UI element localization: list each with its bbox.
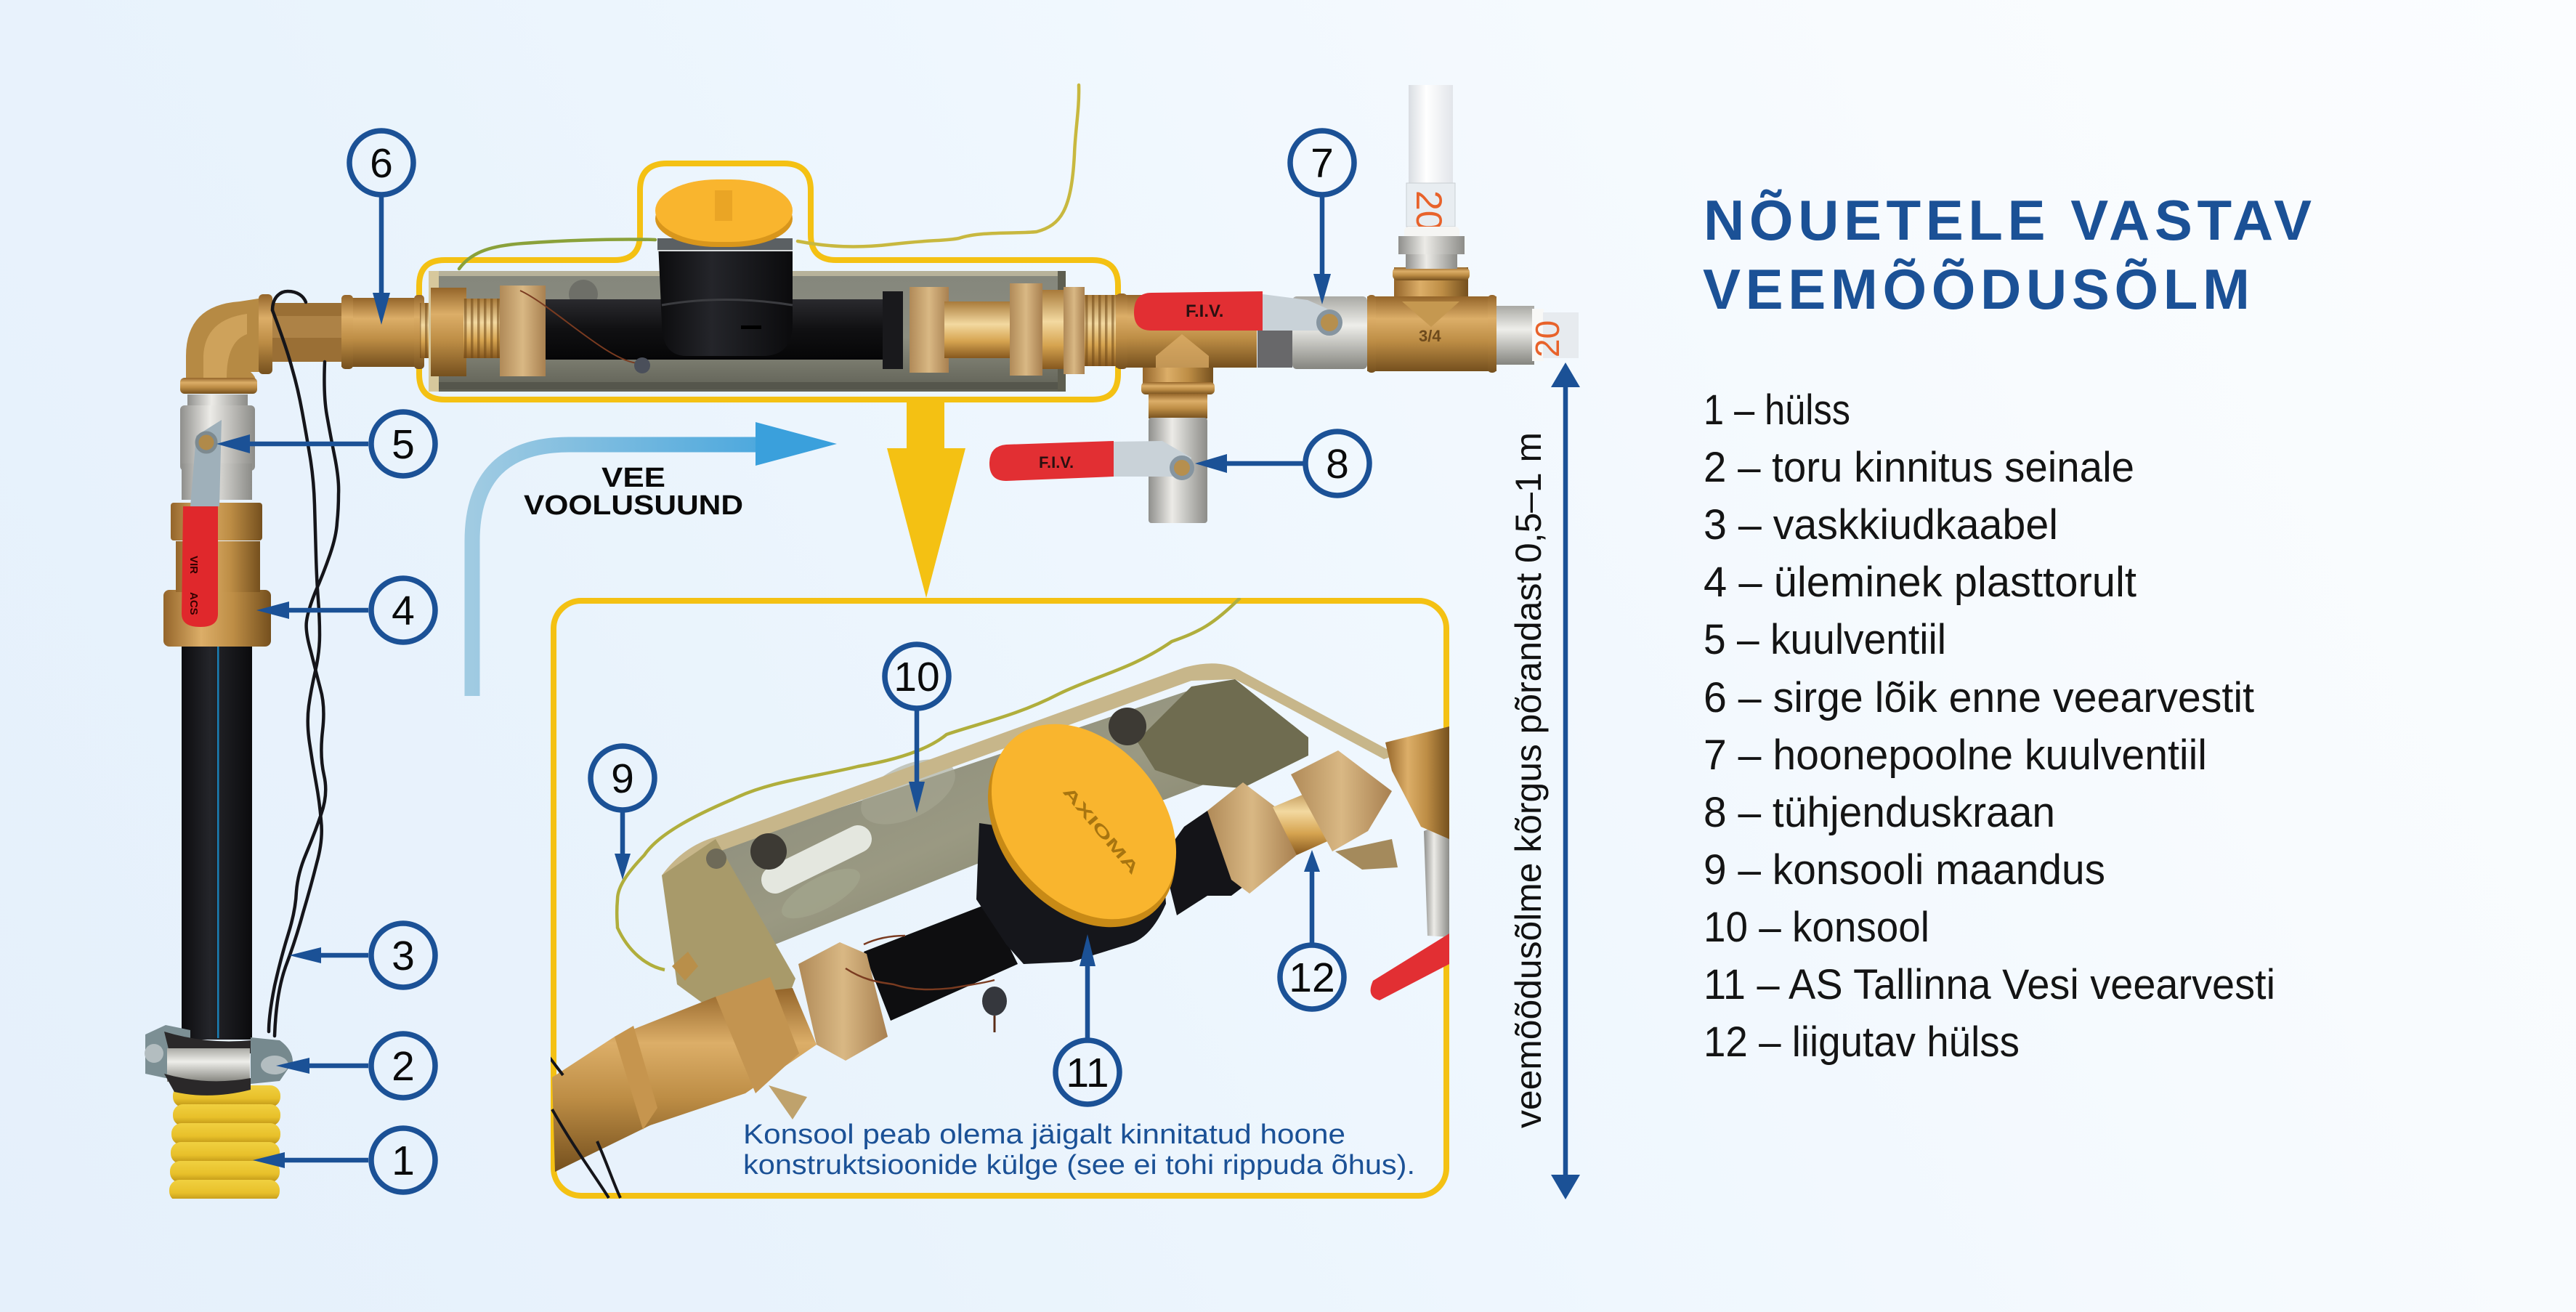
black meter pipe — [546, 299, 885, 360]
detail view photo: AXIOMA — [1059, 783, 1142, 878]
yellow meter cap — [988, 756, 1175, 927]
black plastic pipe — [182, 644, 252, 1040]
legend list: 2 – toru kinnitus seinale — [1704, 444, 2134, 491]
photo: fittings inside console — [431, 283, 1116, 376]
photo: copper wire and seal — [520, 291, 650, 373]
red handle — [1371, 934, 1449, 1000]
water flow direction arrow — [472, 422, 837, 696]
callout 1 — [253, 1128, 435, 1192]
silver valve — [1257, 329, 1292, 368]
callout 7 — [1290, 131, 1354, 304]
callout 12: 12 — [1289, 955, 1335, 1001]
copper wire — [846, 936, 995, 989]
brass pipes and nuts — [552, 988, 817, 1172]
detail view frame — [554, 601, 1446, 1196]
elbow — [186, 298, 263, 381]
console left arm — [662, 839, 795, 1016]
flow direction label: VOOLUSUUND — [524, 490, 743, 521]
white riser pipe and fittings — [1409, 85, 1453, 187]
flow direction label — [524, 463, 743, 521]
photo: black copper-fiber cable — [269, 291, 339, 1036]
detail note text: Konsool peab olema jäigalt kinnitatud hoone — [743, 1119, 1345, 1150]
brass nuts — [500, 286, 546, 376]
left tee and drain branch — [1143, 356, 1213, 385]
legend list: 8 – tühjenduskraan — [1704, 789, 2055, 836]
title — [1703, 188, 2312, 321]
legend list: 6 – sirge lõik enne veearvestit — [1704, 674, 2254, 721]
callout 2 — [276, 1034, 435, 1098]
callout 4: 4 — [392, 588, 415, 634]
grounding wire — [617, 598, 1240, 970]
photo: drain valve handle: F.I.V. — [1039, 453, 1074, 471]
title: NÕUETELE VASTAV — [1704, 188, 2312, 252]
title: VEEMÕÕDUSÕLM — [1703, 257, 2250, 321]
brass coupling — [163, 590, 271, 647]
pipe clamp — [145, 1025, 293, 1096]
callout 1: 1 — [392, 1138, 415, 1184]
silver ball valve body — [187, 394, 248, 427]
callout 5 — [216, 412, 435, 476]
callout 2: 2 — [392, 1043, 415, 1090]
photo: right-hand tee, valves and drain: 20 — [1409, 190, 1449, 231]
callout 5: 5 — [392, 421, 415, 468]
right tee — [1394, 267, 1468, 304]
slot — [775, 839, 858, 880]
callout 7: 7 — [1311, 140, 1334, 187]
legend list: 12 – liigutav hülss — [1704, 1019, 2020, 1066]
callout 12 — [1280, 850, 1344, 1009]
legend list: 4 – üleminek plasttorult — [1704, 559, 2136, 606]
legend list: 3 – vaskkiudkaabel — [1704, 501, 2058, 548]
yellow corrugated sleeve — [169, 1085, 280, 1202]
callout 11 — [1056, 934, 1119, 1104]
photo: horizontal straight section — [272, 295, 434, 369]
right outlet with ferrule — [1496, 306, 1534, 365]
legend list: 1 – hülss — [1704, 386, 1850, 434]
console plate — [722, 679, 1236, 944]
photo: vertical inlet pipe with valve and elbow: VIR — [187, 556, 200, 574]
meter body — [976, 823, 1166, 964]
large yellow arrow down to detail view — [887, 402, 965, 598]
callout 10: 10 — [894, 654, 940, 700]
callout 9: 9 — [611, 756, 634, 802]
photo: vertical inlet pipe with valve and elbow: ACS — [187, 592, 200, 615]
detail note text — [743, 1119, 1415, 1181]
legend list: 11 – AS Tallinna Vesi veearvesti — [1704, 961, 2275, 1008]
legend list: 7 – hoonepoolne kuulventiil — [1704, 732, 2207, 779]
callout 9 — [591, 746, 655, 880]
height dimension arrow — [1551, 363, 1580, 1199]
photo: console bracket — [429, 271, 1066, 392]
callout 10 — [885, 644, 949, 813]
photo: water meter with yellow cap — [655, 179, 793, 356]
valve lever and red handle — [190, 420, 222, 506]
bolts — [750, 833, 787, 870]
callout 3 — [289, 923, 435, 987]
legend list — [1704, 386, 2275, 1066]
photo: right-hand tee, valves and drain: 3/4 — [1419, 327, 1441, 345]
photo: grounding wire (upper) — [459, 85, 1079, 269]
flow direction label: VEE — [602, 463, 665, 493]
black cable ends — [549, 1057, 620, 1198]
yellow frame around meter assembly — [419, 163, 1118, 400]
legend list: 5 – kuulventiil — [1704, 616, 1946, 663]
photo: building-side ball valve handle — [1134, 291, 1340, 333]
photo: drain valve handle — [989, 441, 1192, 481]
callout 8: 8 — [1326, 441, 1349, 487]
photo: right-hand tee, valves and drain — [1116, 85, 1579, 523]
callout 3: 3 — [392, 933, 415, 979]
console top edge — [662, 663, 1398, 886]
callout 11: 11 — [1066, 1050, 1109, 1096]
black meter pipes — [864, 904, 1018, 1021]
callout 6 — [349, 131, 413, 325]
height dimension label: veemõõdusõlme kõrgus põrandast 0,5–1 m — [1508, 432, 1549, 1128]
right silver valve — [1424, 821, 1449, 937]
callout 8 — [1195, 432, 1369, 495]
callout 6: 6 — [370, 140, 393, 187]
meter seal — [982, 987, 1007, 1016]
photo: vertical inlet pipe with valve and elbow — [145, 294, 293, 1202]
legend list: 10 – konsool — [1704, 904, 1929, 951]
photo: right-hand tee, valves and drain: 20 — [1528, 320, 1566, 357]
callout 4 — [256, 578, 435, 642]
photo: building-side ball valve handle: F.I.V. — [1186, 301, 1223, 321]
legend list: 9 – konsooli maandus — [1704, 846, 2105, 894]
detail view photo — [549, 598, 1449, 1198]
detail note text: konstruktsioonide külge (see ei tohi rippuda õhus). — [743, 1150, 1415, 1181]
